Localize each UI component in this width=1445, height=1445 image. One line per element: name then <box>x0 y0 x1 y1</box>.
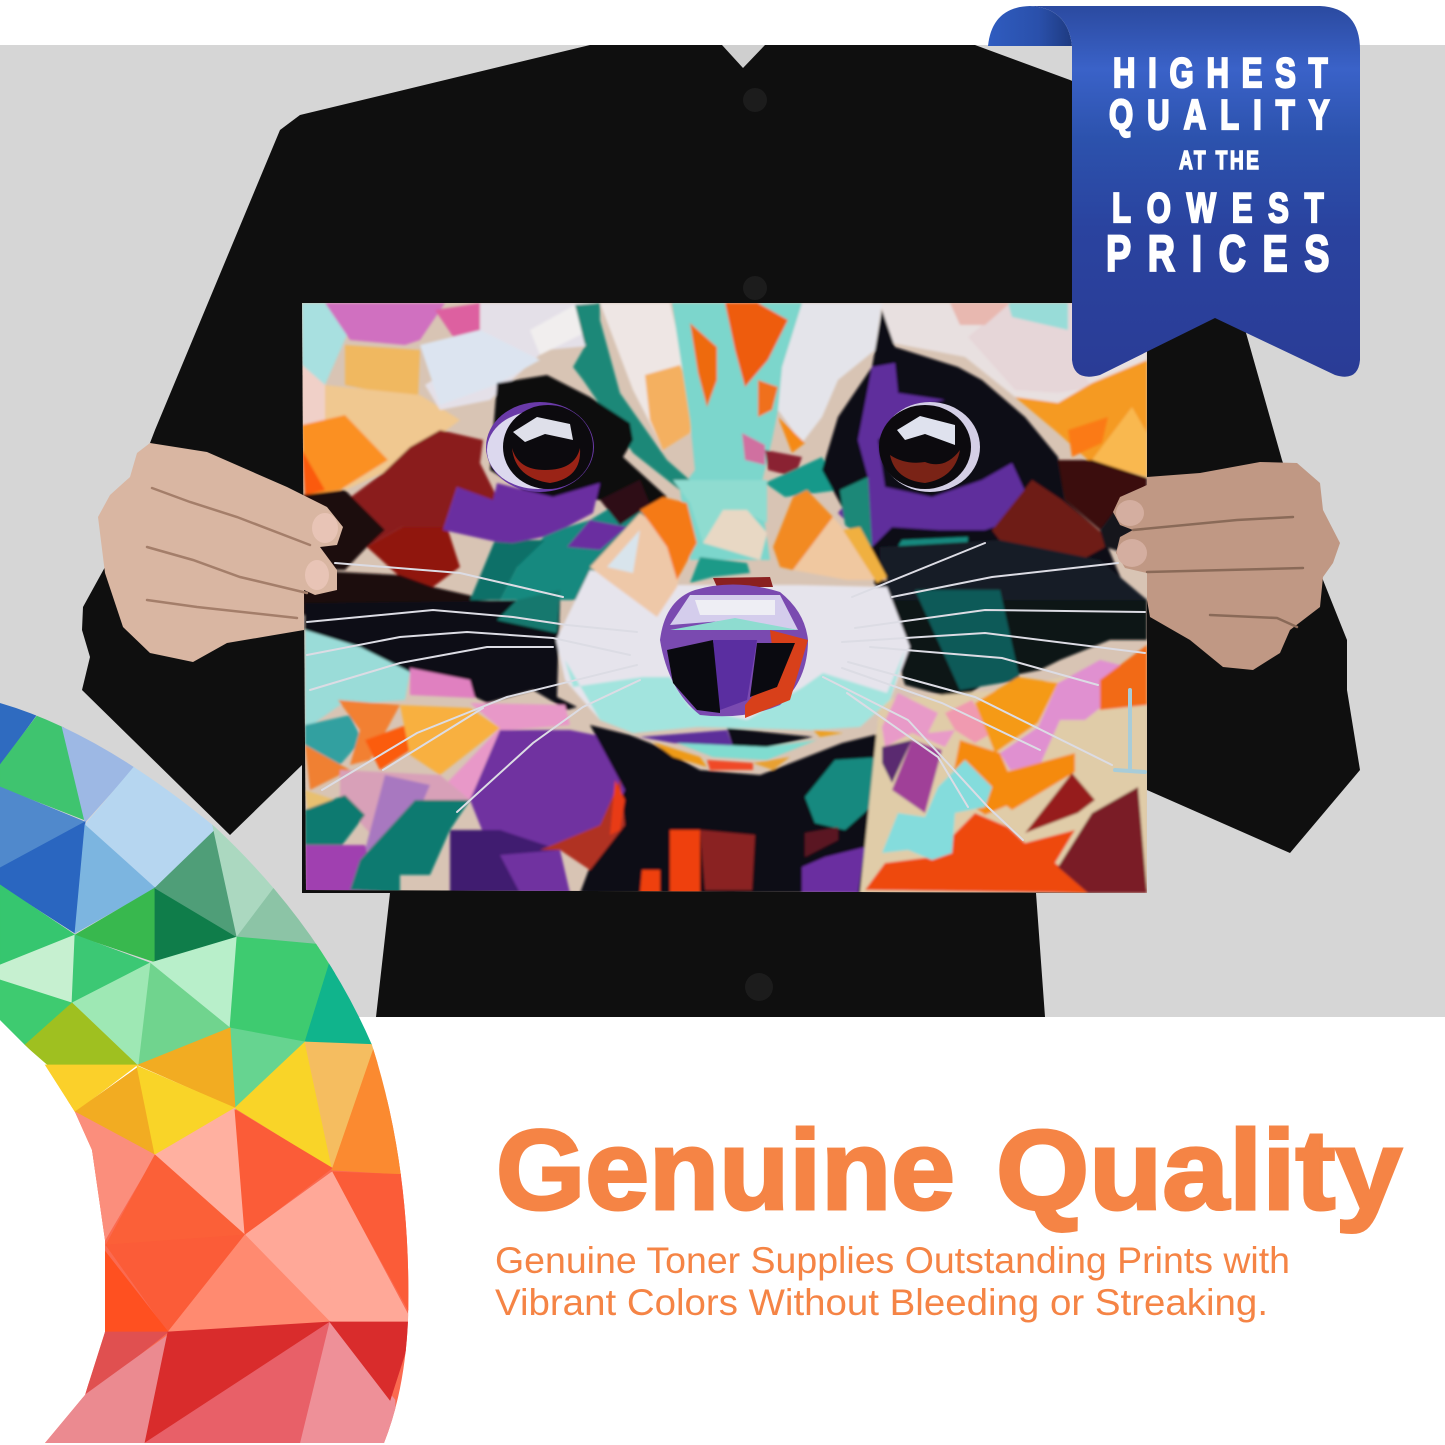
muzzle <box>556 570 910 733</box>
person in black shirt <box>82 45 1360 1017</box>
chest <box>580 725 885 893</box>
lower right <box>860 660 1147 893</box>
low-poly colour arc <box>0 695 420 1445</box>
lower black band left/right <box>305 600 577 710</box>
painting: raccoon <box>302 303 1148 893</box>
ribbon text: AT THE <box>1179 145 1259 175</box>
ribbon text: QUALITY <box>1109 91 1330 138</box>
centre top <box>598 303 683 444</box>
description text: Vibrant Colors Without Bleeding or Streaking. <box>495 1282 1268 1323</box>
left mask <box>490 375 667 510</box>
ribbon fold <box>988 6 1072 46</box>
ribbon text: PRICES <box>1106 224 1329 282</box>
ribbon text <box>1106 49 1330 282</box>
ribbon text: HIGHEST <box>1113 49 1328 96</box>
right top <box>880 303 1147 403</box>
whiskers <box>307 543 1145 840</box>
background panel <box>0 45 1445 1017</box>
left eye <box>486 402 594 492</box>
nose <box>660 577 808 718</box>
ribbon body <box>1030 6 1360 377</box>
description text: Genuine Toner Supplies Outstanding Prints with <box>495 1240 1290 1281</box>
right eye <box>879 402 980 492</box>
right hand <box>1113 462 1340 670</box>
right mask <box>822 310 1130 600</box>
left hand <box>98 443 343 662</box>
teal under left eye <box>498 507 646 602</box>
ribbon badge <box>988 6 1360 377</box>
title: Quality <box>996 1107 1402 1233</box>
title <box>496 1107 1402 1233</box>
title: Genuine <box>496 1107 955 1233</box>
mouth <box>640 730 733 747</box>
description text <box>495 1240 1290 1323</box>
ribbon text: LOWEST <box>1112 184 1324 231</box>
top left <box>302 303 347 385</box>
lower left strokes <box>305 630 410 730</box>
